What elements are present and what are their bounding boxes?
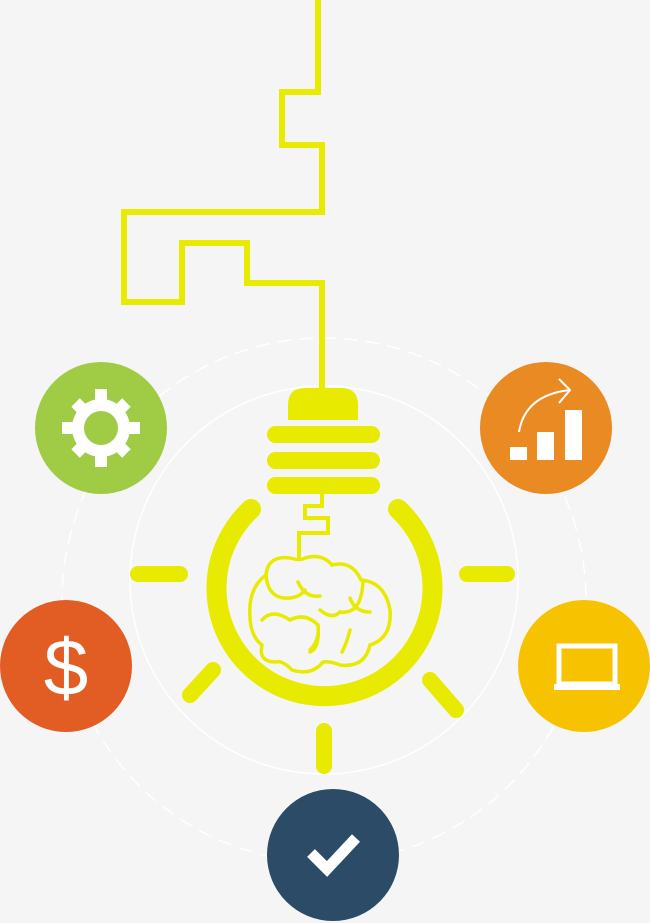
icon: gear circle <box>35 362 167 494</box>
filament <box>299 494 328 558</box>
icon: check circle <box>267 789 399 921</box>
bulb <box>216 388 432 696</box>
brain <box>250 557 390 672</box>
bulb cap <box>288 388 358 420</box>
rays <box>138 574 507 766</box>
wire <box>124 0 322 392</box>
icon: laptop circle <box>518 600 650 732</box>
bulb bands <box>267 426 380 494</box>
icon: dollar circle: $ <box>44 623 88 712</box>
bulb glass arc <box>216 509 432 696</box>
icon: dollar circle <box>0 600 132 732</box>
icon: chart circle <box>480 362 612 494</box>
